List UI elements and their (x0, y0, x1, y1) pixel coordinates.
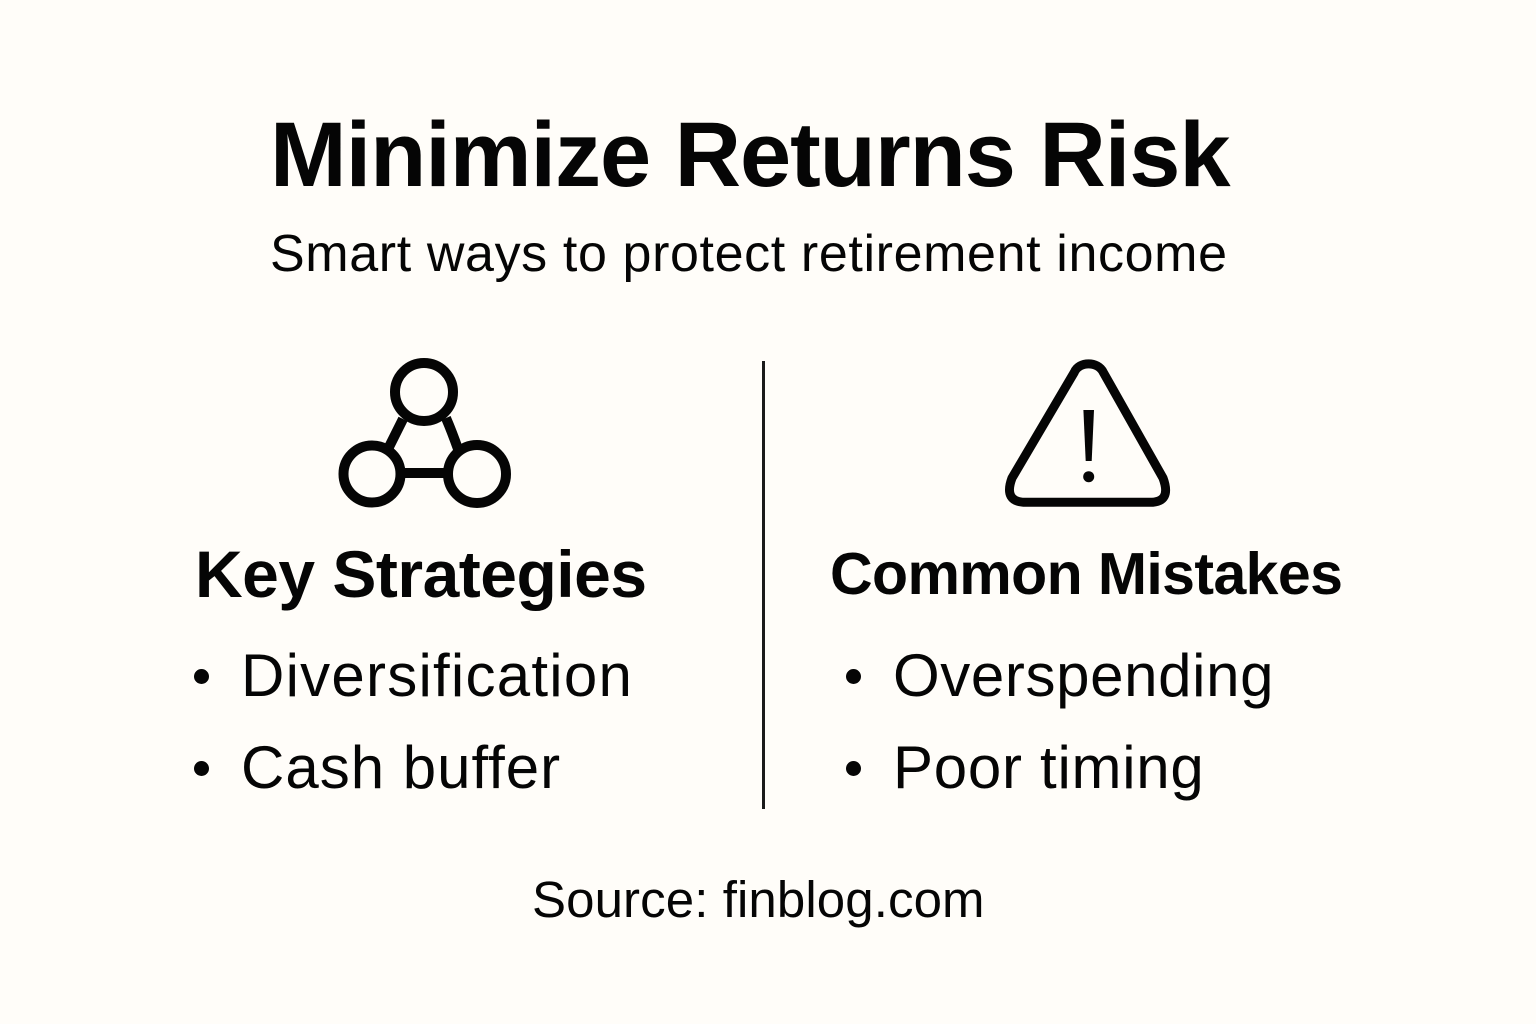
list item: poor timing: Poor timing (893, 734, 1204, 801)
panel: common mistakes (830, 541, 1342, 801)
vertical divider (762, 361, 765, 809)
heading: key strategies: Key Strategies (195, 537, 647, 611)
panel: key strategies (194, 537, 647, 801)
icon: three connected circles (338, 358, 511, 508)
list item: diversification: Diversification (241, 642, 633, 709)
source note: Source: finblog.com (532, 871, 985, 928)
heading: common mistakes: Common Mistakes (830, 541, 1342, 607)
subtitle: Smart ways to protect retirement income (270, 225, 1228, 283)
icon: warning triangle (1005, 359, 1170, 507)
list item: overspending: Overspending (893, 642, 1274, 709)
list item: cash buffer: Cash buffer (241, 734, 561, 801)
title: Minimize Returns Risk (270, 104, 1230, 206)
